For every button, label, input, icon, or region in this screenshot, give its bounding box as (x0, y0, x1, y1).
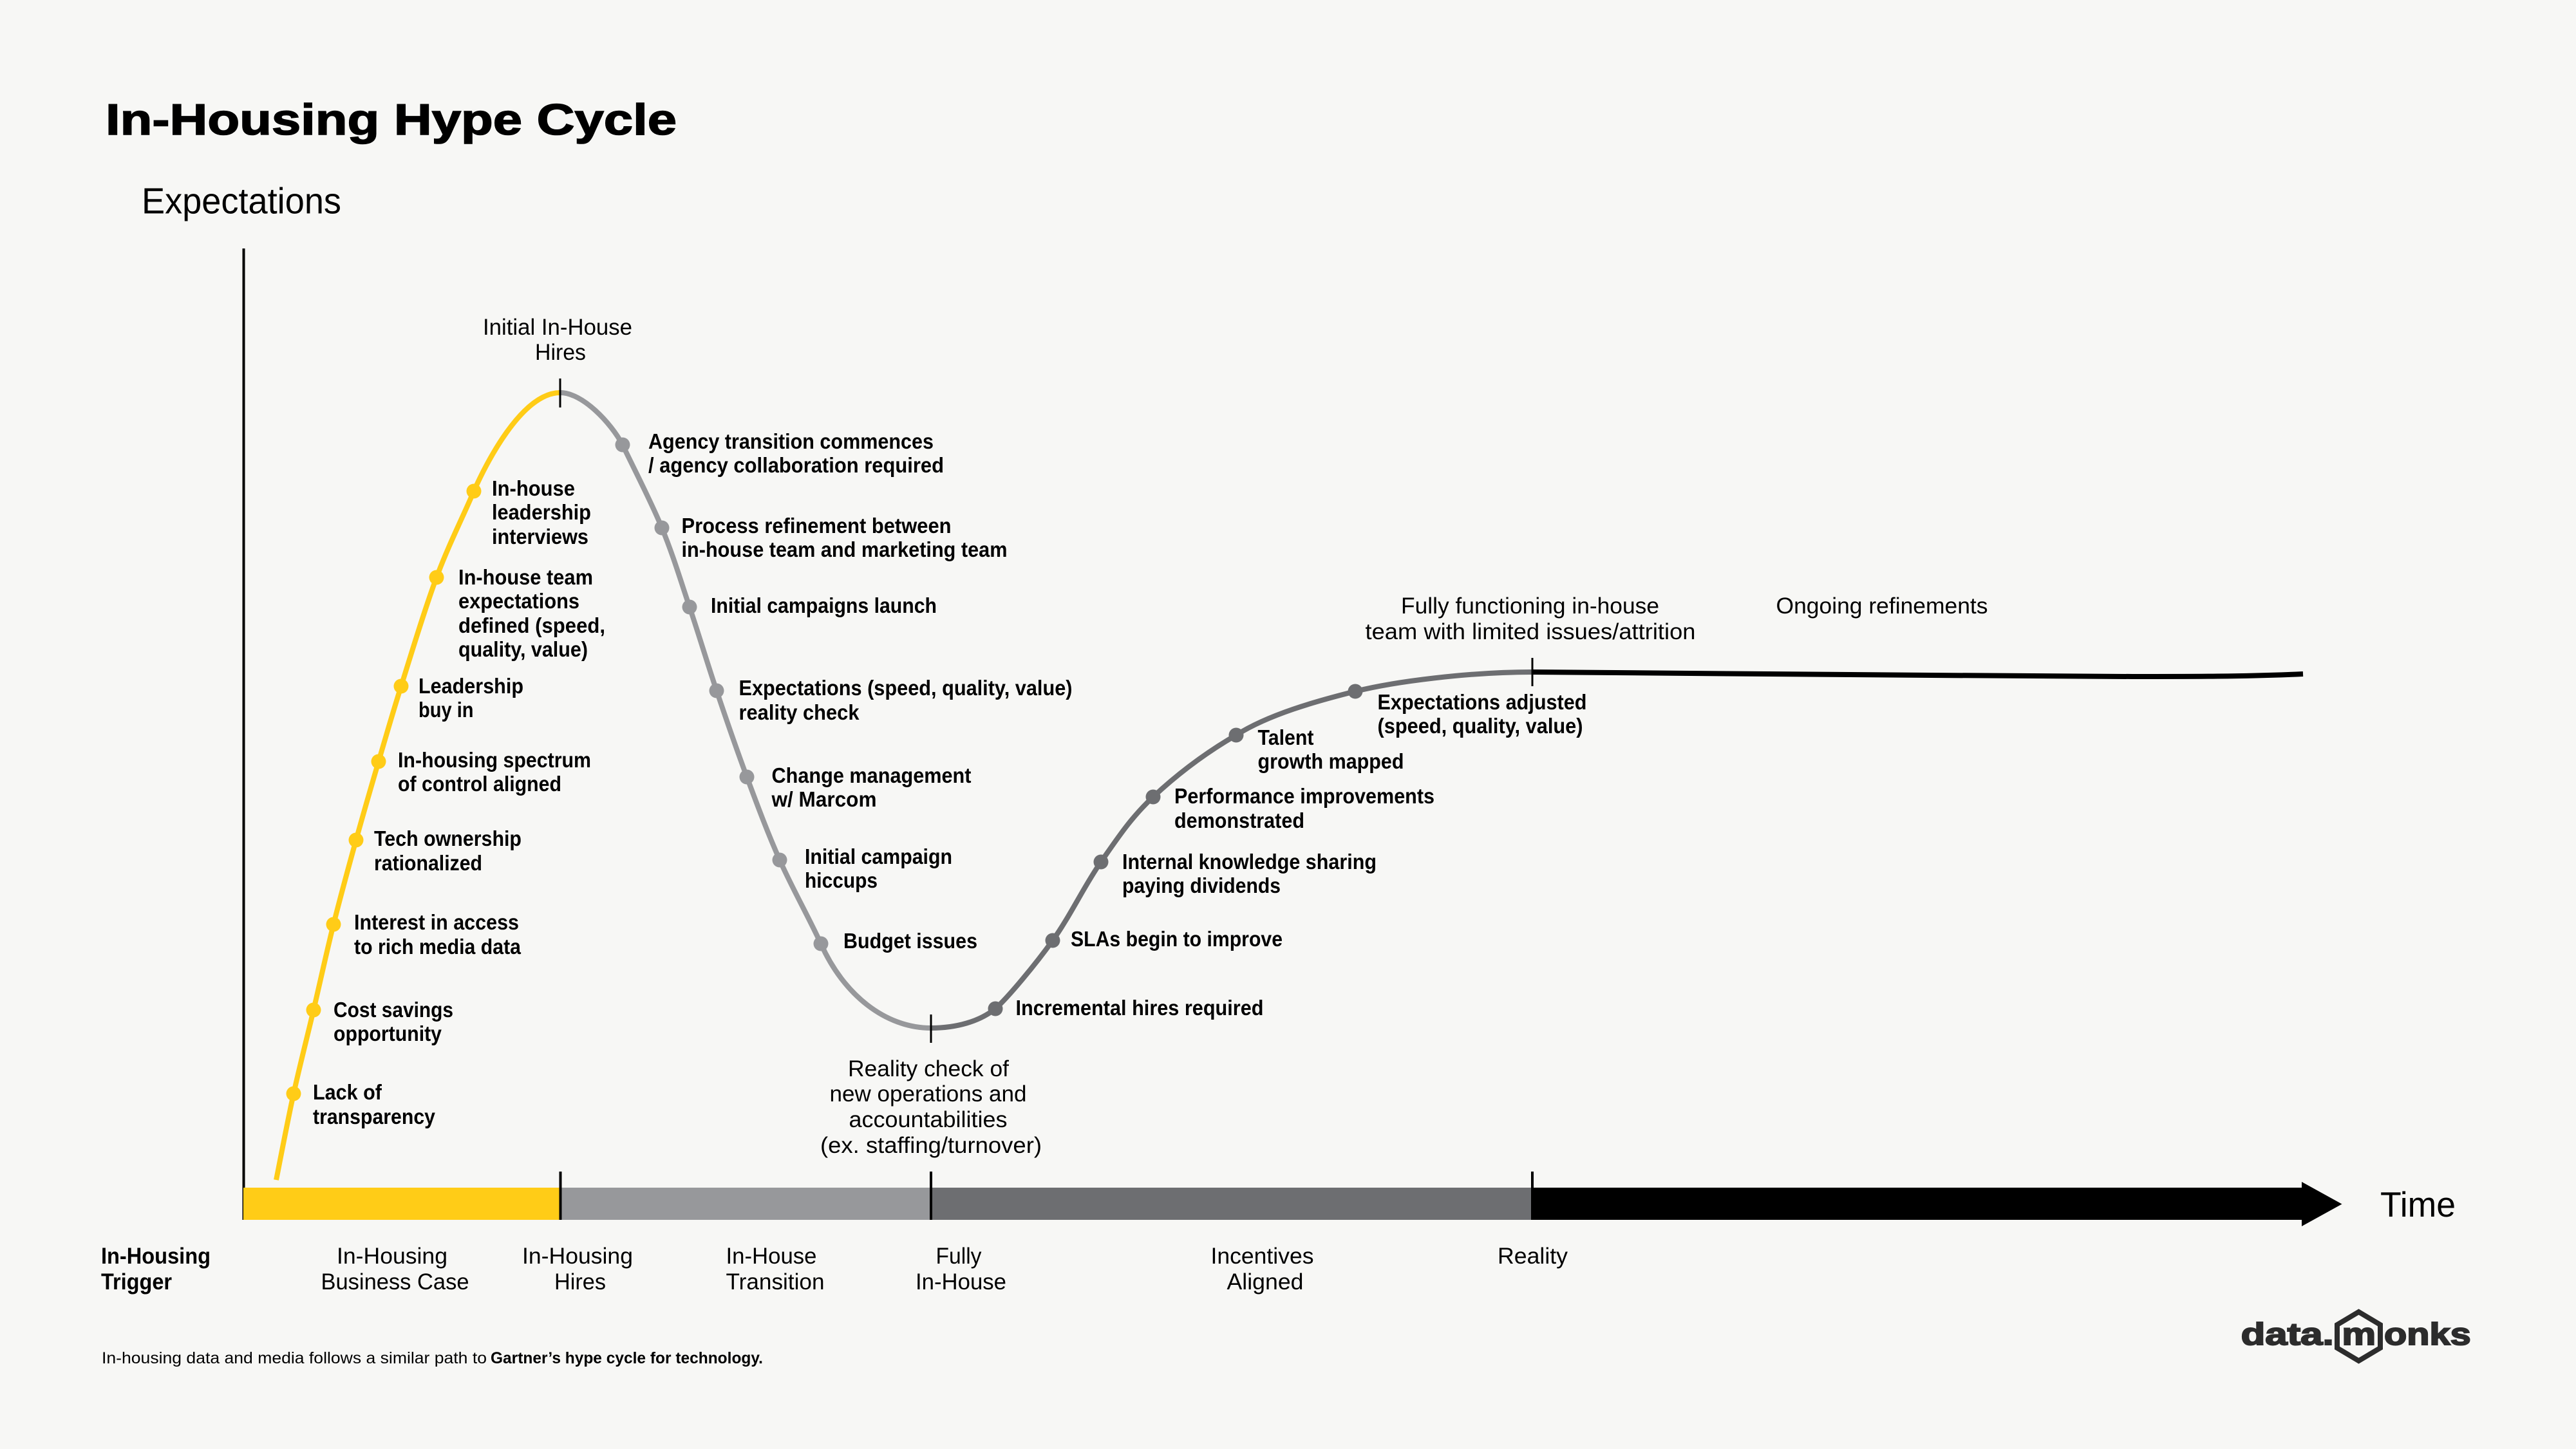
phase label: In-Housing Trigger: In-Housing (101, 1244, 211, 1269)
y axis line (242, 248, 245, 1220)
phase label: Incentives Aligned: Aligned (1227, 1269, 1303, 1295)
label: Cost savings opportunity: Cost savings (334, 998, 453, 1022)
phase label: In-Housing Business Case (321, 1244, 469, 1295)
phase label: In-Housing Business Case: In-Housing (337, 1244, 447, 1269)
label: Budget issues: Budget issues (843, 929, 977, 953)
label: Leadership buy in (418, 674, 523, 722)
label: Tech ownership (374, 827, 522, 875)
label: In-housing spectrum: of control aligned (398, 772, 561, 796)
label: In-house team expectations: expectations (458, 589, 579, 613)
phase label: Incentives Aligned: Incentives (1210, 1244, 1313, 1269)
label: Performance improvements: Performance improvements (1174, 784, 1434, 808)
phase label: In-Housing Hires: In-Housing (522, 1244, 633, 1269)
label: Expectations adjusted: Expectations adjusted (1378, 690, 1586, 714)
label: In-house leadership interviews: leadership (492, 500, 591, 524)
label: Expectations reality check: Expectations (speed, quality, value) (739, 676, 1073, 700)
milestone: Reality check (820, 1056, 1042, 1158)
label: In-housing spectrum: In-housing spectrum (398, 748, 591, 772)
curve: dark gray recovery segment (931, 672, 1532, 1028)
y axis label: Expectations: Expectations (142, 180, 341, 221)
label: Expectations adjusted (1378, 690, 1586, 738)
label: In-house leadership interviews (492, 476, 591, 548)
label: In-house team expectations (458, 565, 605, 661)
phase label: In-Housing Business Case: Business Case (321, 1269, 469, 1295)
phase label: In-Housing Hires: Hires (554, 1269, 606, 1295)
label: In-house team expectations: defined (speed, (458, 613, 605, 637)
phase label: In-Housing Trigger: Trigger (101, 1269, 172, 1295)
label: Cost savings opportunity (334, 998, 453, 1045)
dark gray stage points (988, 684, 1362, 1016)
label: Initial campaign hiccups: hiccups (805, 868, 878, 892)
label: Change management (771, 763, 971, 811)
x axis label: Time: Time (2380, 1184, 2456, 1224)
title: In-Housing Hype Cycle (106, 95, 677, 144)
milestone: Fully functioning in-house team (1365, 594, 1696, 644)
milestone: Fully functioning in-house team: team with limited issues/attrition (1365, 619, 1696, 644)
phase label: Fully In-House: In-House (916, 1269, 1006, 1295)
label: Talent growth mapped: growth mapped (1258, 749, 1404, 773)
label: Leadership buy in: buy in (418, 698, 474, 722)
label: Change management: Change management (771, 763, 971, 787)
label: Process refinement: Process refinement between (681, 514, 952, 538)
time axis bar with arrow (243, 1172, 2342, 1226)
label: Performance improvements: demonstrated (1174, 809, 1304, 832)
label: In-house team expectations: quality, value) (458, 637, 588, 661)
label: In-housing spectrum (398, 748, 591, 796)
label: Lack of transparency (313, 1080, 436, 1128)
logo: data.monks: onks (2384, 1318, 2471, 1352)
label: Change management: w/ Marcom (771, 787, 877, 811)
label: Expectations reality check (739, 676, 1073, 724)
milestone: Reality check: Reality check of (848, 1056, 1009, 1081)
label: In-house leadership interviews: interviews (492, 525, 588, 548)
footnote: In-housing data and media follows a similar path to (102, 1349, 487, 1367)
milestone: Reality check: new operations and (829, 1081, 1026, 1107)
label: Tech ownership: Tech ownership (374, 827, 522, 850)
logo: data.monks (2241, 1312, 2471, 1361)
label: Incremental hires required: Incremental hires required (1016, 996, 1263, 1020)
curve phase ticks (559, 379, 1534, 1043)
phase label: In-Housing Trigger (101, 1244, 211, 1295)
label: Talent growth mapped (1258, 725, 1404, 773)
label: In-house leadership interviews: In-house (492, 476, 575, 500)
phase label: In-Housing Hires (522, 1244, 633, 1295)
label: Interest in access: to rich media data (354, 935, 522, 958)
milestone: Initial In-House Hires: Initial In-House (483, 315, 632, 340)
yellow stage points (286, 484, 482, 1101)
phase label: Incentives Aligned (1210, 1244, 1313, 1295)
label: Interest in access (354, 910, 522, 958)
label: Process refinement: in-house team and marketing team (681, 538, 1007, 561)
label: Interest in access: Interest in access (354, 910, 519, 934)
footnote (102, 1349, 763, 1367)
label: Agency transition: Agency transition commences (648, 429, 934, 453)
logo: data.monks: data. (2241, 1318, 2334, 1352)
label: Initial campaign hiccups (805, 845, 952, 892)
label: Talent growth mapped: Talent (1258, 725, 1314, 749)
label: Agency transition: / agency collaboration required (648, 453, 944, 477)
label: Internal knowledge sharing (1122, 850, 1377, 897)
curve: yellow rising segment (276, 393, 560, 1180)
gray stage points (616, 438, 828, 951)
label: Performance improvements (1174, 784, 1434, 832)
label: Internal knowledge sharing: paying dividends (1122, 874, 1281, 897)
milestone: Ongoing refinements: Ongoing refinements (1776, 594, 1988, 619)
milestone: Initial In-House Hires: Hires (535, 340, 586, 365)
logo: data.monks: m (2342, 1318, 2376, 1352)
label: Expectations adjusted: (speed, quality, value) (1378, 714, 1583, 738)
label: Cost savings opportunity: opportunity (334, 1022, 442, 1045)
label: SLAs begin to improve: SLAs begin to improve (1071, 927, 1283, 951)
curve: gray falling segment (560, 393, 931, 1028)
phase label: Fully In-House (916, 1244, 1006, 1295)
phase label: In-House Transition: In-House (726, 1244, 816, 1269)
label: Tech ownership: rationalized (374, 851, 482, 875)
label: Initial campaigns launch: Initial campaigns launch (711, 594, 937, 617)
label: Initial campaign hiccups: Initial campaign (805, 845, 952, 868)
phase label: In-House Transition: Transition (726, 1269, 824, 1295)
phase label: In-House Transition (726, 1244, 824, 1295)
phase label: Fully In-House: Fully (936, 1244, 982, 1269)
label: Lack of transparency: transparency (313, 1105, 436, 1128)
label: Internal knowledge sharing: Internal knowledge sharing (1122, 850, 1377, 874)
label: Process refinement (681, 514, 1007, 561)
milestone: Reality check: (ex. staffing/turnover) (820, 1133, 1042, 1158)
label: In-house team expectations: In-house team (458, 565, 593, 589)
phase label: Reality: Reality (1498, 1244, 1568, 1269)
curve: black plateau segment (1532, 672, 2303, 677)
label: Expectations reality check: reality check (739, 700, 860, 724)
milestone: Initial In-House Hires (483, 315, 632, 365)
milestone: Reality check: accountabilities (849, 1107, 1007, 1132)
label: Leadership buy in: Leadership (418, 674, 523, 698)
footnote: Gartner’s hype cycle for technology. (491, 1349, 763, 1367)
label: Lack of transparency: Lack of (313, 1080, 382, 1104)
milestone: Fully functioning in-house team: Fully functioning in-house (1401, 594, 1659, 619)
label: Agency transition (648, 429, 944, 477)
